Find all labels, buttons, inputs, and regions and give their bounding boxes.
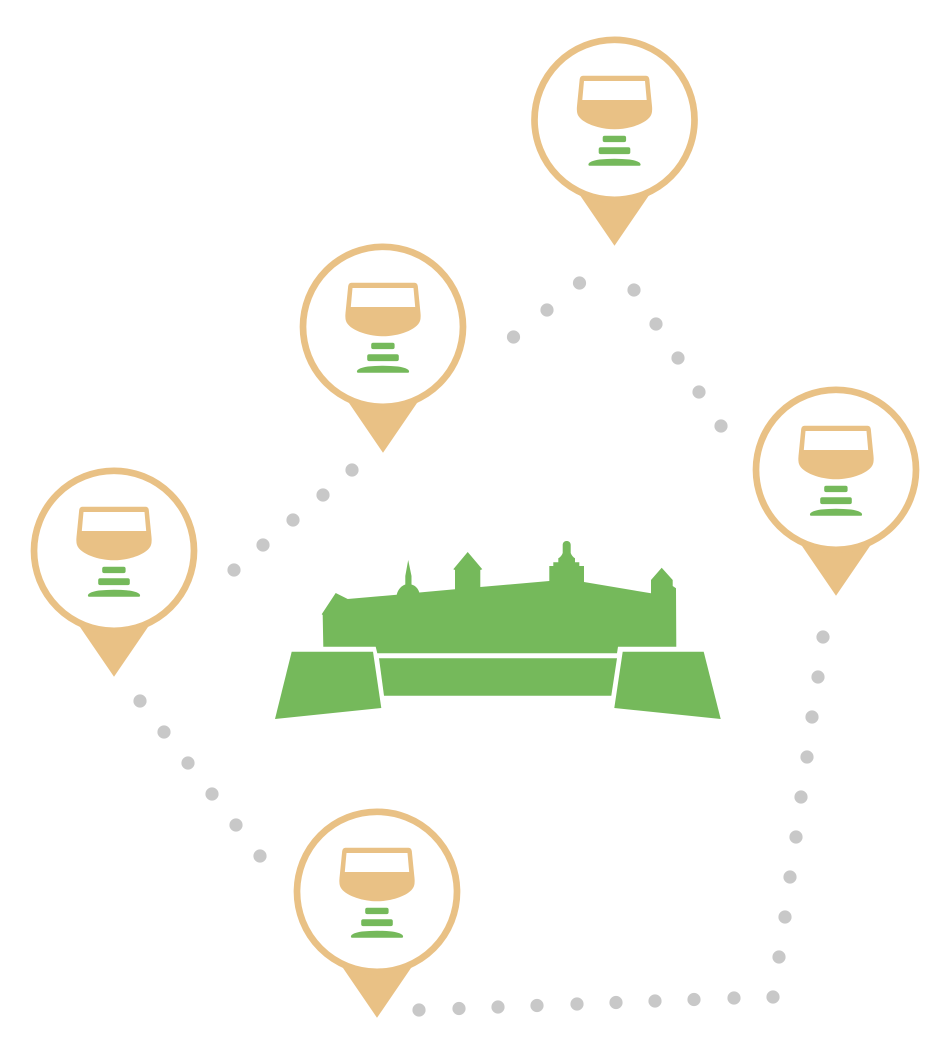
map pin: bottom xyxy=(297,812,457,1018)
castle main building xyxy=(322,541,676,653)
icon: glass stem xyxy=(810,486,862,516)
icon: wine glass xyxy=(76,507,152,560)
icon: wine glass xyxy=(345,283,421,336)
castle lower wall xyxy=(379,658,617,696)
icon: wine glass xyxy=(798,426,874,479)
icon: glass stem xyxy=(351,908,403,938)
icon: wine glass xyxy=(577,76,652,129)
icon: wine glass xyxy=(339,848,415,901)
icon: glass stem xyxy=(588,136,641,166)
icon: glass stem xyxy=(88,567,140,597)
castle silhouette xyxy=(275,541,721,719)
map pin: top xyxy=(534,40,694,246)
right bastion xyxy=(614,652,721,719)
map pin: upper left xyxy=(303,247,463,453)
left bastion xyxy=(275,652,381,719)
dotted route xyxy=(133,276,830,1017)
icon: glass stem xyxy=(357,343,409,373)
map pin: left xyxy=(34,471,194,677)
map pin: right xyxy=(756,390,916,596)
